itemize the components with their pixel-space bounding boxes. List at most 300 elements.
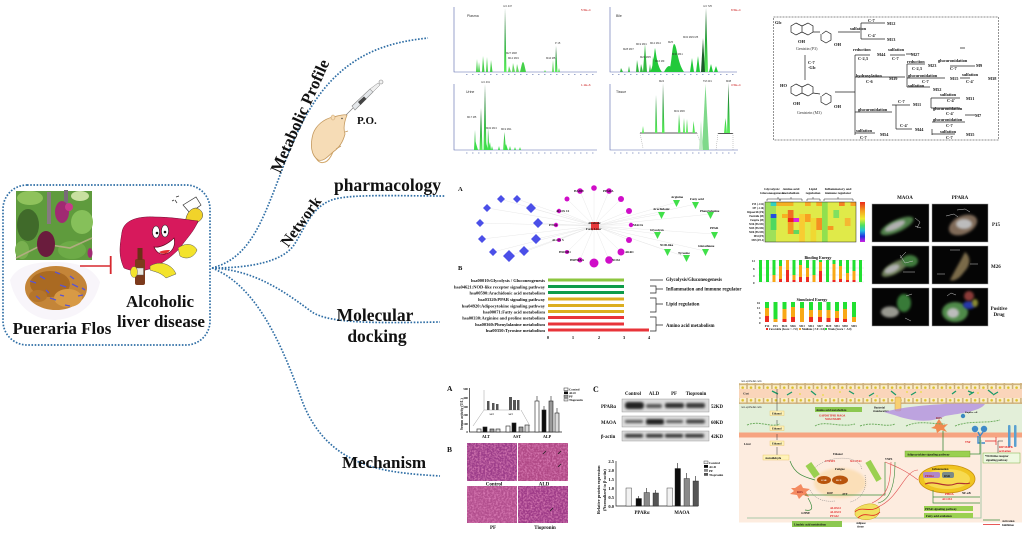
panel: Pueraria Flos and alcoholic liver disease: [3, 185, 210, 345]
callout: amino acid metabolism: Bacterial: [874, 406, 885, 410]
chart: bile spectrum: m/z 725: [703, 5, 713, 8]
chart: urine spectrum: m/z 431: [481, 81, 491, 84]
callout: adipocytokine signaling pathway: [905, 431, 980, 457]
chart: bile spectrum: 8.5E+4: [731, 8, 741, 12]
panel: docking poses: [872, 196, 1008, 326]
gut labels and microbes: Gut: [743, 392, 750, 396]
chart: tissue spectrum: 3.5E+4: [731, 83, 741, 87]
chart: bile spectrum: M16 M9: [655, 59, 665, 63]
scheme labels: sulfation: [908, 83, 925, 88]
chart: compound-target-pathway network: Arachidonic: [653, 207, 670, 211]
chart: urine spectrum: 1.1E+6: [581, 83, 591, 87]
callout: amino acid metabolism: Amino acid metabolism: [816, 408, 847, 412]
heading: Molecular docking: docking: [347, 326, 407, 346]
chart: relative protein expression: MAOA: [674, 511, 690, 516]
structure: Genistin: Genistin (P3): [796, 46, 818, 51]
chart: simulation energy stacked bars: [757, 297, 857, 331]
chart: bile spectrum: [610, 5, 741, 74]
docking pose: positive drug PPARA: [932, 288, 988, 326]
pathway labels: hsa04621:NOD-like receptor signaling pathway: [454, 284, 546, 290]
chart: binding heatmap: metabolism: [783, 191, 800, 195]
macrophage and sinusoid: ROS: [936, 417, 942, 420]
images: western blots: 52KD: [711, 405, 724, 410]
scheme labels: C-4': [947, 98, 955, 103]
callouts: PPAR and fatty acid oxidation: PHOA: [945, 492, 954, 496]
heatmap category brackets: [767, 197, 853, 201]
hepatocyte with mitochondria: SLC27A1: [850, 460, 862, 463]
hepatocyte nucleus with PPAR: Inflammation: [932, 468, 949, 471]
pathway labels: hsa00360:Phenylalanine metabolism: [475, 322, 545, 327]
chart: compound-target-pathway network: HADH: [574, 189, 584, 193]
inhibition symbol: [80, 256, 111, 274]
hepatocyte with mitochondria: ROS: [797, 491, 803, 494]
icon: cartoon liver with beer: [120, 196, 203, 285]
pathway labels: hsa00010:Glycolysis / Gluconeogenesis: [471, 278, 545, 283]
scheme labels: C-7: [946, 135, 954, 140]
chart: serum enzyme bars: 400: [463, 396, 468, 400]
callout: adipocytokine signaling pathway: Adipocytokine signaling pathway: [907, 452, 950, 456]
chart: compound-target-pathway network: PTGS: [549, 223, 558, 227]
scheme labels: [808, 18, 996, 140]
chart: simulation energy stacked bars: P14: [765, 325, 770, 328]
scheme labels: C-4': [868, 33, 876, 38]
chart: compound-target-pathway network: Arginine: [671, 195, 684, 199]
panel: metabolic pathway scheme: [774, 17, 998, 140]
chart: plasma spectrum: Plasma: [467, 14, 479, 18]
callout: amino acid metabolism: GAPDH TPH1 MAOA: [819, 414, 845, 418]
chart: serum enzyme bars: 100: [463, 422, 468, 426]
scheme labels: C-7: [892, 56, 900, 61]
chart: binding energy stacked bars: 12: [752, 259, 756, 263]
axis ticks: 1: [572, 335, 575, 340]
chart: simulation energy stacked bars: M31: [834, 325, 840, 328]
chart: compound-target-pathway network: Phenylalanine: [700, 209, 720, 213]
docking pose: M26 MAOA: [872, 246, 929, 284]
heading: Molecular docking: Molecular: [337, 305, 413, 325]
chart: simulation energy stacked bars: M29: [826, 325, 832, 328]
chart: binding heatmap: Pesticide (M): [749, 215, 764, 218]
scheme labels: M35: [966, 132, 974, 137]
legend: activation and inhibition: [983, 520, 1015, 527]
receptor: EGF and HGF: activation: [999, 450, 1011, 453]
green pathway nodes: [654, 200, 718, 262]
docking pose: P15 PPARA: [932, 204, 988, 242]
scheme labels: sulfation: [940, 92, 957, 97]
hepatocyte with mitochondria: 4-HNE: [801, 511, 810, 515]
chart: serum enzyme bars: 500: [463, 387, 468, 391]
ethanol absorption chain: Ethanol: [772, 412, 782, 416]
scheme labels: sulfation: [888, 47, 905, 52]
gut labels and microbes: non-epithelial cells: [741, 380, 762, 383]
chart: simulation energy stacked bars: M14: [808, 325, 814, 328]
chart: compound-target-pathway network: NOS2: [612, 258, 621, 262]
scheme labels: M12: [887, 21, 895, 26]
chart: relative protein expression: [596, 459, 723, 516]
scheme labels: M39: [889, 76, 897, 81]
scheme labels: M31: [966, 96, 974, 101]
chart: relative protein expression: Control: [709, 461, 720, 465]
scheme labels: glucuronidation: [933, 117, 963, 122]
callout: linoleic acid metabolism: [792, 507, 842, 527]
gut labels and microbes: non-epithelial cells: [741, 406, 762, 409]
heading: Mechanism: Mechanism: [342, 453, 426, 472]
images: liver histology: [467, 443, 568, 531]
chart: relative protein expression: 1.5: [608, 477, 615, 482]
hepatocyte nucleus with PPAR: PPARα: [925, 475, 934, 478]
label: Pueraria Flos: Pueraria Flos: [13, 319, 112, 338]
label: B bar chart: B: [458, 265, 463, 272]
pathway labels: hsa00330:Arginine and proline metabolism: [462, 316, 545, 320]
label: C western blot panel: C: [593, 385, 599, 394]
structure: Genistein: OH: [793, 101, 801, 106]
chart: simulation energy stacked bars: M38: [842, 325, 848, 328]
blue compound nodes: [476, 195, 543, 262]
images: western blots: [601, 392, 724, 441]
scheme labels: M54: [880, 132, 889, 137]
chart: bile spectrum: M22 M35: [640, 55, 651, 59]
chart: serum enzyme bars: ALT: [489, 413, 494, 416]
heading: Network: Network: [277, 193, 325, 250]
chart: relative protein expression: 2.5: [608, 459, 615, 464]
heading: pharmacology: pharmacology: [334, 175, 441, 195]
chart: urine spectrum: M19 M11: [501, 127, 512, 131]
callout: linoleic acid metabolism: ALOX15: [830, 511, 841, 514]
chart: binding heatmap: Amino acid: [783, 187, 799, 191]
chart: KEGG pathway enrichment bars: [454, 278, 742, 340]
callout: linoleic acid metabolism: Linoleic acid metabolism: [794, 522, 826, 526]
photo: pueraria plant: [15, 190, 93, 260]
chart: plasma spectrum: M44 M5: [546, 56, 556, 60]
chart: compound-target-pathway network: Fatty acid: [690, 197, 704, 201]
chart: bile spectrum: M19 M31: [636, 42, 647, 46]
hepatocyte with mitochondria: [790, 453, 885, 515]
hepatocyte with mitochondria: ROP: [827, 492, 833, 495]
chart: bile spectrum: M28 M37: [623, 47, 634, 51]
macrophage and sinusoid: Kupffer cell: [965, 411, 978, 414]
chart: binding energy stacked bars: 8: [753, 267, 755, 271]
scheme labels: glucuronidation: [933, 106, 963, 111]
scheme labels: C-7: [860, 135, 868, 140]
chart: relative protein expression: Tiopronin: [709, 473, 723, 477]
scheme labels: C-4': [966, 79, 974, 84]
panel: mechanism pathway diagram: [739, 380, 1022, 528]
chart: serum enzyme bars: AST: [513, 434, 521, 439]
scheme labels: C-4': [900, 123, 908, 128]
chart: compound-target-pathway network: NOD-like: [660, 243, 674, 247]
chart: urine spectrum: [454, 81, 597, 153]
structure: Genistin: [775, 20, 842, 51]
pathway labels: [454, 278, 546, 333]
photo: dried flowers on dish: [10, 262, 100, 320]
chart: compound-target-pathway network: ALOX 12: [556, 209, 570, 213]
panel: docking poses: M26: [991, 265, 1001, 270]
chart: relative protein expression: 0.5: [608, 495, 615, 500]
images: western blots: 60KD: [711, 421, 724, 426]
callout: linoleic acid metabolism: ALOX12: [830, 507, 841, 510]
chart: tissue spectrum: [610, 79, 741, 153]
images: liver histology: PF: [490, 526, 496, 531]
chart: simulation energy stacked bars: 16: [757, 301, 760, 305]
images: western blots: PF: [671, 392, 677, 397]
chart: simulation energy stacked bars: P15: [773, 325, 778, 328]
chart: binding heatmap: Gluconeogenesis: [760, 191, 785, 195]
chart: compound-target-pathway network: Glutathione: [698, 244, 715, 248]
structure: Genistein: [780, 83, 842, 115]
chart: relative protein expression: 1.0: [608, 486, 615, 491]
panel: docking poses: P15: [992, 223, 1001, 228]
chart: binding heatmap: Inflammatory and: [825, 187, 851, 191]
chart: serum enzyme bars: [460, 387, 583, 439]
docking pose: P15 MAOA: [872, 204, 929, 242]
chart: binding heatmap: Rigosertib (P6): [747, 211, 764, 214]
scheme labels: sulfation: [850, 26, 867, 31]
heading: Metabolic Profile: Metabolic Profile: [266, 56, 333, 176]
chart: serum enzyme bars: ALP: [543, 434, 552, 439]
scheme labels: reduction: [907, 59, 925, 64]
chart: KEGG pathway enrichment bars: Amino acid metabolism: [666, 324, 715, 329]
chart: KEGG pathway enrichment bars: Inflammation and immune regulator: [666, 288, 742, 292]
scheme labels: M44: [915, 127, 924, 132]
structure: Genistein: HO: [780, 83, 788, 88]
chart: simulation energy stacked bars: Favorable (Score < -7.0): [769, 328, 798, 331]
chart: relative protein expression: 2.0: [608, 468, 615, 473]
chart: simulation energy stacked bars: Simulated Energy: [797, 297, 827, 302]
chart: compound-target-pathway network: Fatty Liver: [586, 227, 602, 231]
scheme labels: M44: [877, 52, 886, 57]
serum legend: ALD: [569, 391, 576, 395]
chart: bile spectrum: M25: [668, 40, 674, 44]
chart: simulation energy stacked bars: M24: [782, 325, 788, 328]
connector curves: [212, 38, 445, 476]
panel: docking poses: Positive: [991, 307, 1007, 312]
scheme labels: glucuronidation: [938, 58, 968, 63]
callout: NOD-like receptor signaling pathway: signaling pathway: [986, 459, 1008, 462]
adipose tissue: VNPS: [885, 458, 893, 461]
structure: Genistein: Genistein (M3): [797, 110, 822, 115]
callout: amino acid metabolism: translocation: [873, 410, 889, 413]
chart: relative protein expression: 0.0: [608, 504, 615, 509]
chart: binding energy stacked bars: 0: [753, 281, 755, 285]
label: Alcoholic liver disease: Alcoholic: [126, 292, 194, 311]
scheme labels: C-7: [808, 60, 816, 65]
scheme labels: C-7: [922, 79, 930, 84]
chart: urine spectrum: M32 M13: [486, 126, 497, 130]
axis ticks: 4: [648, 335, 651, 340]
ethanol absorption chain: [744, 389, 789, 460]
panel: docking poses: MAOA: [897, 196, 913, 201]
scheme labels: M27: [911, 52, 920, 57]
chart: relative protein expression: PPARα: [634, 511, 650, 516]
chart: tissue spectrum: Tissue: [616, 90, 626, 94]
hepatocyte with mitochondria: Ethanol: [833, 453, 843, 456]
serum legend: PF: [569, 394, 573, 398]
chart: relative protein expression: ALD: [709, 465, 717, 469]
callouts: PPAR and fatty acid oxidation: PPAR signaling pathway: [925, 507, 957, 511]
receptor: EGF and HGF: TNF: [965, 441, 971, 444]
chart: bile spectrum: M12 M14: [650, 41, 661, 45]
chart: relative protein expression: (Normalized to β-actin): [602, 469, 607, 511]
chart: binding heatmap: immune regulator: [825, 191, 852, 195]
chart: binding heatmap: M26 (P6-M3): [749, 231, 764, 234]
chart: compound-target-pathway network: HSP90AA: [570, 258, 585, 262]
scheme labels: M9: [976, 63, 982, 68]
structure: Genistin: OH: [798, 39, 806, 44]
callouts: PPAR and fatty acid oxidation: NF-κB: [962, 491, 971, 495]
pathway labels: hsa00071:Fatty acid metabolism: [483, 310, 545, 314]
chart: plasma spectrum: M27 M38: [506, 51, 517, 55]
chart: serum enzyme bars: 300: [463, 405, 468, 409]
hepatocyte with mitochondria: CYP2E1: [825, 460, 836, 463]
scheme labels: glucuronidation: [858, 107, 888, 112]
legend: activation and inhibition: Activation: [1002, 520, 1015, 523]
panel: metabolic profile spectra: [454, 5, 741, 153]
layer backgrounds: [739, 380, 1022, 522]
panel: docking poses: PPARA: [952, 196, 969, 201]
label: P.O.: P.O.: [357, 115, 377, 127]
chart: compound-target-pathway network: Alcoholic: [588, 221, 601, 225]
chart: simulation energy stacked bars: Weak (Score > -5.0): [828, 328, 852, 331]
chart: bile spectrum: Bile: [616, 14, 622, 18]
images: western blots: PPARα: [601, 405, 616, 410]
chart: binding heatmap: M34 (P5): [754, 235, 764, 238]
legend: activation and inhibition: Inhibition: [1002, 524, 1014, 527]
chart: urine spectrum: Urine: [466, 90, 474, 94]
scheme labels: M38: [988, 76, 996, 81]
chart: plasma spectrum: 5.5E+4: [581, 8, 591, 12]
scheme labels: sulfation: [856, 128, 873, 133]
chart: tissue spectrum: M31 M36: [674, 109, 685, 113]
chart: compound-target-pathway network: Glycolysis: [650, 228, 665, 232]
chart: plasma spectrum: [454, 5, 597, 74]
label: B histology panel: B: [447, 445, 452, 454]
chart: binding energy stacked bars: 4: [753, 274, 755, 278]
callout: NOD-like receptor signaling pathway: [747, 440, 1020, 518]
scheme labels: M7: [975, 113, 982, 118]
chart: serum enzyme bars: 0: [466, 430, 468, 434]
hepatocyte with mitochondria: HCX: [836, 479, 842, 482]
callout: linoleic acid metabolism: PTGS2: [830, 515, 839, 518]
scheme labels: C-6: [866, 79, 874, 84]
scheme labels: glucuronidation: [908, 73, 938, 78]
chart: tissue spectrum: TM 431: [703, 79, 712, 83]
scheme labels: C-2,3: [858, 56, 868, 61]
scheme labels: hydroxylation: [856, 73, 882, 78]
panel: docking poses: Drug: [993, 313, 1005, 318]
chart: simulation energy stacked bars: 4: [759, 316, 761, 320]
serum legend: [564, 388, 583, 402]
pathway labels: hsa00350:Tyrosine metabolism: [486, 328, 545, 333]
axis ticks: 3: [623, 335, 626, 340]
chart: serum enzyme bars: Serum activity (U/L): [460, 397, 464, 430]
callouts: PPAR and fatty acid oxidation: ACOX1: [942, 497, 953, 501]
images: liver histology: ALD: [539, 482, 550, 488]
scheme labels: reduction: [853, 47, 871, 52]
scheme labels: C-7: [946, 123, 954, 128]
chart: bile spectrum: M40 M41: [672, 52, 683, 56]
adipose tissue: tissue: [857, 526, 864, 528]
structure: Genistin: Glc: [775, 20, 782, 25]
chart: urine spectrum: M17 M5: [467, 115, 477, 119]
chart: simulation energy stacked bars: 12: [757, 306, 760, 310]
chart: tissue spectrum: M24: [659, 79, 665, 83]
chart: binding heatmap: M7 (-1.16): [752, 207, 764, 210]
ethanol absorption chain: Ethanol: [772, 428, 782, 430]
images: western blots: MAOA: [601, 421, 617, 426]
images: liver histology: Control: [486, 482, 503, 488]
scheme labels: M13: [887, 37, 895, 42]
axis ticks: 0: [547, 335, 550, 340]
enzyme inset: [473, 390, 530, 426]
chart: compound-target-pathway network: PPAR: [710, 226, 719, 230]
label: A network: A: [458, 186, 463, 193]
images: western blots: Control: [625, 392, 642, 397]
scheme labels: C-7: [950, 66, 958, 71]
scheme arrows: [805, 23, 975, 135]
axis ticks: [547, 335, 651, 340]
scheme labels: M11: [913, 102, 921, 107]
label: Alcoholic liver disease: liver disease: [117, 312, 205, 331]
chart: binding heatmap: M45 (P3-2): [752, 239, 764, 242]
images: western blots: β-actin: [601, 435, 616, 440]
chart: compound-target-pathway network: HSD2B1: [559, 250, 571, 254]
chart: plasma spectrum: P 15: [555, 41, 561, 45]
images: liver histology: Tiopronin: [534, 526, 556, 531]
ethanol absorption chain: Ethanol: [772, 442, 782, 446]
images: western blots: ALD: [649, 392, 660, 397]
callouts: PPAR and fatty acid oxidation: [924, 490, 980, 518]
chart: binding heatmap: Fenpiro (M): [750, 219, 764, 222]
receptor: EGF and HGF: RIP MAPK: [999, 446, 1014, 449]
chart: serum enzyme bars: AST: [508, 413, 513, 416]
callout: amino acid metabolism: NOS2 HADH: [825, 418, 842, 421]
category brackets: [650, 280, 663, 331]
scheme labels: C-7: [868, 18, 876, 23]
chart: compound-target-pathway network: ALOX 5: [552, 238, 564, 242]
hepatocyte with mitochondria: Fatigue: [835, 467, 845, 471]
chart: simulation energy stacked bars: M26: [790, 325, 796, 328]
chart: compound-target-pathway network: [476, 185, 720, 268]
images: western blots: 42KD: [711, 435, 724, 440]
hepatocyte nucleus with PPAR: [919, 465, 975, 493]
chart: binding heatmap: M45 (P6-M2): [749, 227, 764, 230]
chart: compound-target-pathway network: Tyrosine: [678, 251, 690, 255]
chart: compound-target-pathway network: PPARA: [603, 189, 614, 193]
scheme labels: M23: [928, 63, 936, 68]
adipose tissue: [855, 458, 918, 528]
chart: serum enzyme bars: ALT: [482, 434, 490, 439]
chart: compound-target-pathway network: MAOA: [633, 223, 644, 227]
scheme labels: sulfation: [962, 72, 979, 77]
chart: KEGG pathway enrichment bars: Glycolysis/Gluconeogenesis: [666, 278, 722, 283]
chart: binding energy stacked bars: Binding Energy: [804, 255, 832, 260]
chart: simulation energy stacked bars: Medium (-7.0~-5.0): [802, 328, 825, 331]
hepatocyte with mitochondria: GAR: [821, 479, 827, 482]
chart: compound-target-pathway network: AKR1: [625, 250, 634, 254]
pathway labels: hsa00590:Arachidonic acid metabolism: [469, 290, 545, 296]
scheme labels: C-4': [946, 111, 954, 116]
docking pose: positive drug MAOA: [872, 288, 929, 326]
callout: amino acid metabolism: [815, 406, 889, 421]
chart: binding heatmap: [747, 187, 865, 242]
chart: relative protein expression: Relative protein expression: [596, 465, 601, 514]
chart: binding heatmap: M16 (P6-M1): [749, 223, 764, 226]
scheme labels: C-7: [898, 99, 906, 104]
serum legend: Tiopronin: [569, 398, 583, 402]
chart: binding heatmap: regulation: [806, 191, 821, 195]
callouts: PPAR and fatty acid oxidation: Fatty acid oxidation: [926, 514, 952, 518]
icon: mouse with syringe: [311, 80, 383, 163]
ethanol absorption chain: Liver: [744, 442, 752, 446]
